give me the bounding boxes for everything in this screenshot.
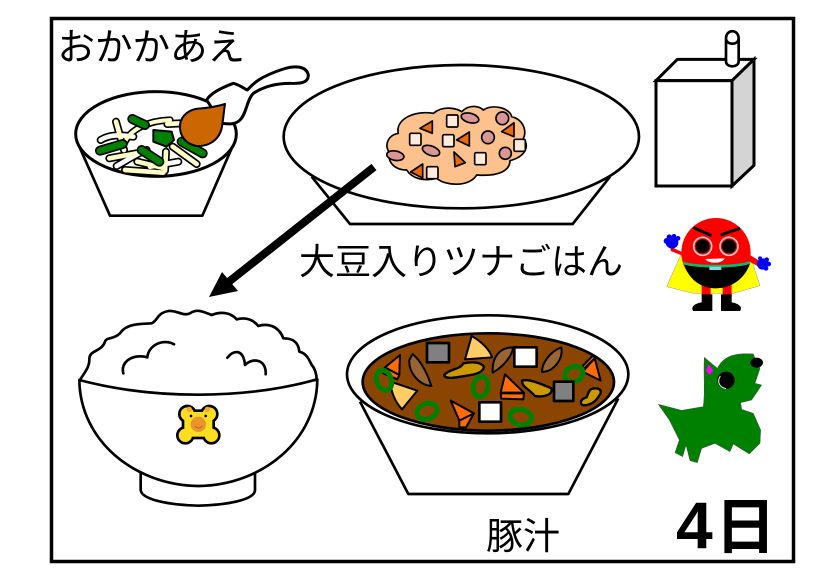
legs bbox=[702, 283, 732, 297]
label: tuna rice: 大豆入りツナごはん bbox=[299, 241, 623, 282]
center pepper bbox=[153, 130, 174, 147]
emblem fill bbox=[179, 407, 218, 442]
pupils bbox=[696, 239, 710, 253]
bowl foot bbox=[141, 473, 255, 506]
green pepper rings bbox=[374, 363, 586, 426]
date: 4th: 日 bbox=[715, 493, 776, 561]
icon: tonjiru soup bowl bbox=[347, 315, 628, 494]
tuna rice mound bbox=[387, 106, 526, 184]
eye rings bbox=[694, 237, 712, 255]
cream sprouts bbox=[109, 122, 197, 173]
title: okaka-ae: おかかあえ bbox=[58, 26, 245, 68]
icon: green dog mascot bbox=[658, 354, 763, 463]
date: 4th bbox=[676, 488, 776, 562]
bowl body bbox=[79, 379, 317, 486]
cape bbox=[667, 255, 760, 293]
belly bbox=[684, 264, 750, 288]
eyebrows bbox=[693, 228, 740, 236]
white sprouts bbox=[101, 135, 178, 167]
mouth bbox=[705, 258, 725, 263]
soup bowl rim bbox=[347, 315, 628, 433]
label: tonjiru: 豚汁 bbox=[486, 516, 560, 557]
burdock slices bbox=[409, 347, 562, 386]
sweet potato wedges bbox=[391, 336, 492, 409]
carrots bbox=[383, 355, 601, 427]
bear emblem bbox=[176, 405, 221, 445]
carton front bbox=[656, 81, 732, 186]
rice detail lines bbox=[123, 342, 266, 374]
spoon handle bbox=[207, 67, 308, 124]
konjac and tofu cubes bbox=[427, 343, 573, 422]
pepper fills bbox=[100, 119, 203, 162]
belt bbox=[683, 262, 750, 266]
carton side bbox=[732, 59, 754, 186]
bowl rim bbox=[76, 92, 236, 176]
icon: tuna rice plate bbox=[284, 65, 639, 224]
eye bbox=[717, 372, 735, 389]
arms bbox=[671, 247, 763, 268]
emblem outline bbox=[176, 405, 221, 445]
arrow bbox=[209, 167, 374, 297]
rice mound bbox=[80, 311, 317, 380]
meat pieces bbox=[444, 362, 601, 405]
straw bbox=[726, 31, 739, 66]
sprout outlines bbox=[101, 122, 197, 173]
broth bbox=[363, 333, 614, 431]
soup bowl base bbox=[360, 398, 618, 494]
dog body bbox=[658, 354, 762, 463]
plate rim bbox=[284, 65, 639, 208]
head bbox=[681, 218, 751, 287]
pepper outlines bbox=[100, 119, 203, 162]
icon: rice bowl bbox=[79, 311, 317, 506]
icon: okaka-ae bowl bbox=[76, 67, 308, 216]
date: 4th: 4 bbox=[676, 488, 713, 562]
plate base bbox=[312, 177, 610, 224]
boots bbox=[692, 294, 741, 311]
gloves bbox=[664, 234, 771, 271]
ear bbox=[706, 364, 713, 375]
bean sprouts and peppers bbox=[100, 119, 203, 173]
icon: milk carton bbox=[656, 31, 754, 186]
icon: red hero mascot bbox=[664, 218, 771, 311]
buckle bbox=[709, 267, 721, 270]
bowl base bbox=[79, 147, 232, 216]
carton top bbox=[656, 59, 754, 81]
nose bbox=[750, 358, 763, 368]
rice toppings bbox=[386, 111, 525, 179]
spoon bowl bbox=[180, 104, 225, 146]
